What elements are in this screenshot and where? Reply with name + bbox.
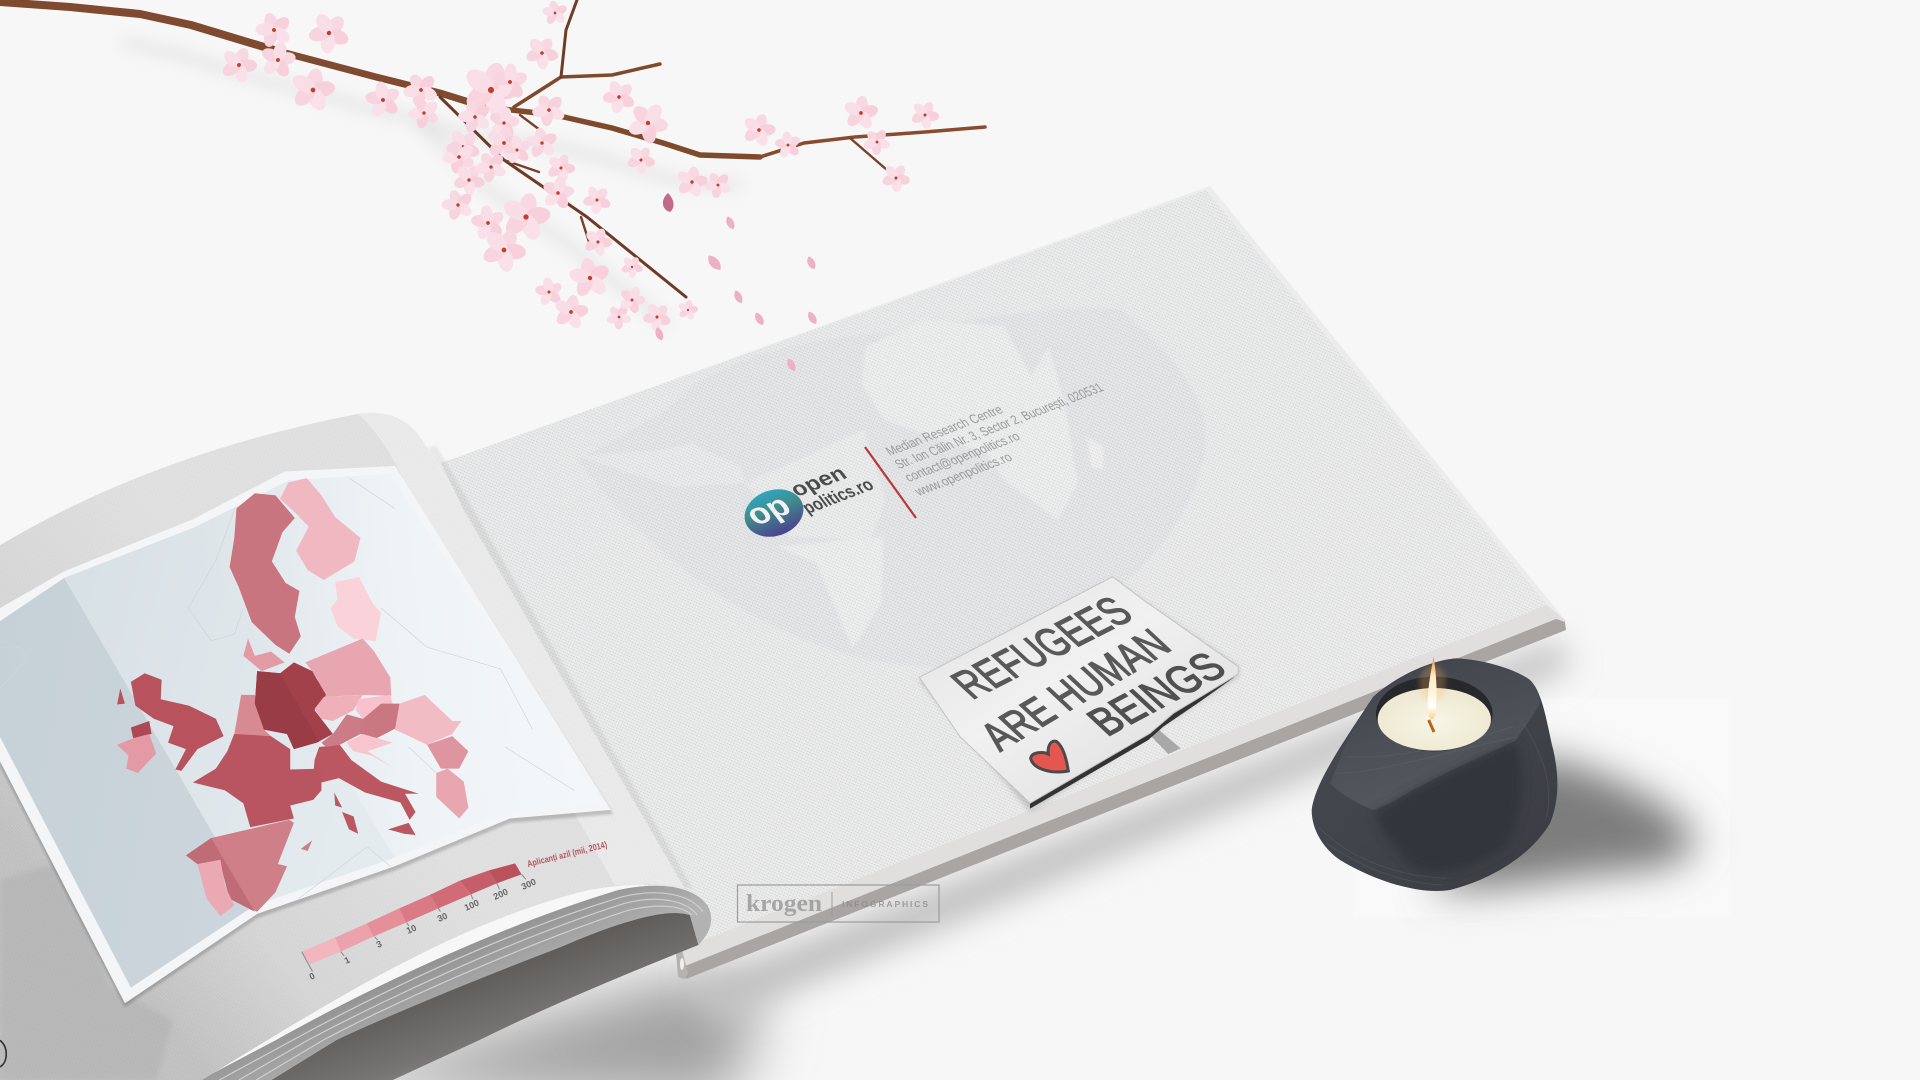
Italy [312, 745, 419, 820]
main branch wood [0, 0, 985, 297]
map sheet [0, 466, 613, 1007]
Austria [321, 714, 363, 747]
contact details [882, 380, 1106, 499]
Baltics [331, 577, 381, 641]
Sicily [388, 823, 416, 835]
legend labels [308, 877, 538, 982]
world map watermark [578, 308, 1206, 667]
map panel 2 [64, 528, 395, 905]
floor shadow under book [300, 640, 1570, 1080]
stone dark face [1375, 742, 1522, 873]
heart [1031, 741, 1068, 772]
stone ribs [1318, 723, 1549, 885]
sign text: REFUGEES: REFUGEES [941, 589, 1143, 707]
flame glow [1419, 665, 1446, 702]
map panel 1 [0, 578, 255, 988]
watermark wordmark: krogen [746, 891, 822, 917]
candle shadow [1430, 753, 1695, 891]
logo wordmark politics.ro: politics.ro [798, 475, 878, 518]
candle ground panel [1353, 697, 1730, 917]
red divider [865, 447, 916, 518]
Germany fold shade [255, 671, 319, 749]
sign text: ARE HUMAN: ARE HUMAN [969, 620, 1181, 759]
Spain fold shade [186, 838, 255, 912]
cover canvas texture [441, 190, 1547, 951]
sign stick [1148, 729, 1181, 754]
legend labels: 100 [463, 898, 481, 913]
page stack [200, 886, 711, 1080]
back cover of book [441, 186, 1566, 951]
wax [1378, 688, 1491, 751]
website: www.openpolitics.ro [910, 449, 1015, 499]
left open page [0, 413, 693, 1080]
Spain [186, 820, 294, 912]
cherry blossom branch [0, 0, 985, 338]
map paper [0, 466, 611, 1003]
Finland [280, 478, 360, 580]
branch shadow [122, 42, 742, 325]
protest sign [919, 577, 1238, 812]
address line 1: Median Research Centre [882, 402, 1006, 458]
sign fold shadow [1030, 670, 1234, 809]
legend labels: 200 [492, 887, 510, 902]
candle holder [1312, 657, 1557, 891]
Czechia [315, 695, 363, 721]
Corsica [334, 792, 342, 808]
Balearic islands [301, 840, 312, 851]
Denmark [243, 639, 285, 671]
Europe choropleth [117, 478, 468, 916]
logo letters op: op [738, 488, 798, 532]
sign text: BEINGS: BEINGS [1076, 644, 1236, 744]
email: contact@openpolitics.ro [901, 429, 1023, 484]
Slovakia [356, 695, 393, 719]
cover surface [441, 190, 1547, 951]
underside of left pages [200, 886, 711, 1080]
Great Britain [131, 673, 224, 771]
Portugal [197, 860, 234, 916]
logo [738, 461, 878, 544]
legend labels: 1 [343, 955, 351, 966]
logo wordmark open: open [785, 461, 851, 501]
map panel 3 [193, 474, 602, 858]
legend labels: 0 [308, 971, 316, 982]
legend labels: 10 [405, 923, 418, 936]
sign drop shadow [919, 580, 1238, 812]
Germany [255, 662, 333, 749]
Hebrides [117, 688, 125, 704]
wick [1429, 720, 1434, 732]
logo badge [738, 482, 810, 544]
stone top facet [1330, 658, 1540, 810]
legend labels: 30 [436, 911, 449, 924]
legend labels: 300 [520, 877, 538, 892]
fallen petals [654, 193, 818, 373]
Hungary [360, 704, 400, 738]
Poland [305, 639, 391, 697]
Greece [436, 769, 468, 819]
Bulgaria [427, 736, 468, 769]
page gutter highlight [358, 413, 684, 888]
address line 2: Str. Ion Călin Nr. 3, Sector 2, București, 020531 [891, 380, 1106, 471]
stone body [1312, 658, 1557, 891]
Ireland [117, 734, 156, 773]
legend title: Aplicanți azil (mii, 2014) [526, 839, 608, 869]
blossoms [214, 0, 945, 338]
sign paper [919, 577, 1238, 803]
Benelux [234, 695, 271, 736]
Sweden [230, 493, 301, 654]
watermark [738, 885, 939, 922]
France [193, 734, 321, 827]
flame [1428, 657, 1437, 719]
cover rim [676, 605, 1566, 979]
page world map fragment [0, 860, 173, 1080]
Romania [395, 695, 461, 745]
Croatia and Slovenia [347, 734, 395, 769]
Sardinia [342, 812, 358, 834]
legend labels: 3 [375, 939, 383, 950]
legend bar [302, 863, 526, 972]
watermark tagline: INFOGRAPHICS [842, 899, 928, 909]
neighbouring outlines [0, 478, 574, 899]
candle well [1376, 677, 1493, 751]
Northern Ireland [131, 721, 152, 738]
